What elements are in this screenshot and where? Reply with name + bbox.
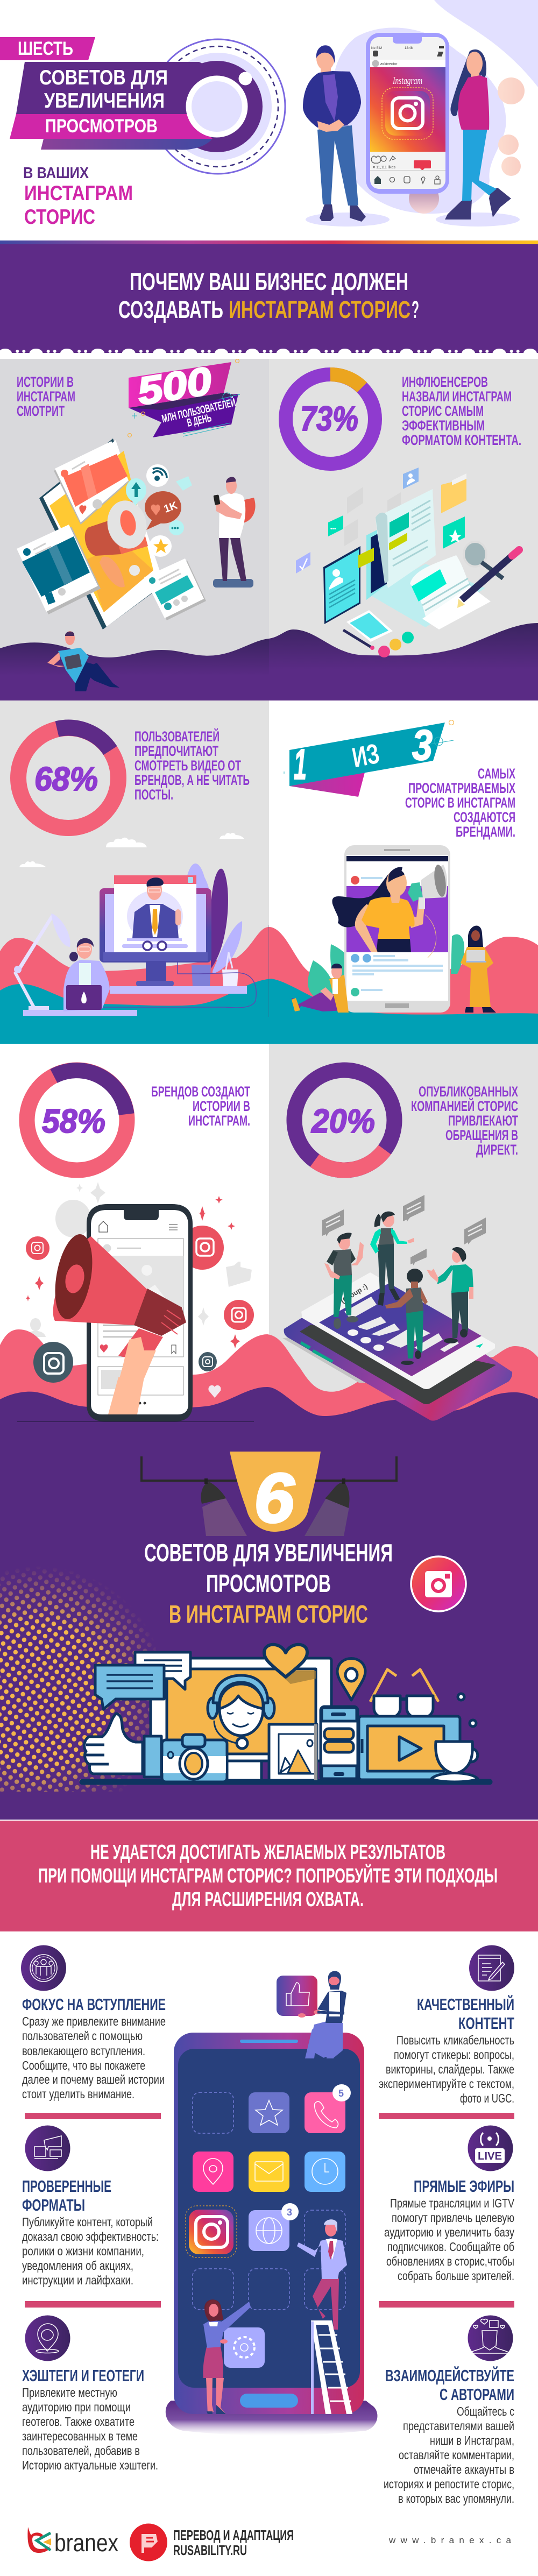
heading — [385, 2366, 514, 2404]
person: woman — [370, 1212, 414, 1306]
teal waves — [0, 979, 538, 1044]
megaphone — [85, 497, 151, 588]
camera lens circle — [151, 39, 285, 174]
smartphone: askivector — [380, 62, 398, 66]
section title: ИНСТАГРАМ СТОРИС — [229, 296, 410, 323]
woman pointing — [203, 2299, 251, 2414]
text: users prefer video: ПРЕДПОЧИТАЮТ — [134, 743, 218, 759]
donut 68%: 68% — [34, 761, 98, 798]
white separator — [0, 1820, 538, 1821]
body text: Общайтесь с — [457, 2404, 514, 2418]
section title: СОЗДАВАТЬ — [118, 296, 223, 323]
text: direct messages — [411, 1084, 518, 1158]
banner: 1 of 3: ИЗ — [350, 738, 382, 774]
body text: уведомления об акциях, — [22, 2259, 133, 2273]
banner: 500 million users: 500 — [134, 359, 215, 413]
lens centre — [186, 72, 252, 138]
pink waves — [0, 927, 538, 1022]
divider — [379, 2301, 514, 2308]
body text: отмечайте аккаунты в — [414, 2462, 514, 2476]
phone frame — [87, 1204, 193, 1421]
text: brands create stories: БРЕНДОВ СОЗДАЮТ — [151, 1084, 250, 1100]
icon: arrow bubble — [126, 478, 146, 506]
text: users prefer video: ПОЛЬЗОВАТЕЛЕЙ — [134, 728, 220, 745]
text: most viewed stories — [405, 766, 515, 840]
heading: ПРОВЕРЕННЫЕ — [22, 2177, 111, 2196]
lower desk — [23, 1010, 137, 1016]
banner: 500 million users: МЛН ПОЛЬЗОВАТЕЛЕЙ — [160, 396, 237, 425]
tip: proven formats — [22, 2125, 159, 2287]
pink label — [0, 37, 95, 60]
logo: rusability — [130, 2523, 294, 2561]
banner: 500 million users: В ДЕНЬ — [186, 412, 213, 429]
person with headphones — [208, 1675, 274, 1749]
person: front figure — [385, 1269, 428, 1365]
title: УВЕЛИЧЕНИЯ — [44, 89, 165, 112]
scalloped edge — [0, 348, 538, 359]
logo: branex: branex — [54, 2529, 118, 2557]
glasses — [370, 1669, 438, 1718]
purple ribbon — [16, 62, 215, 114]
banner: 1 of 3: 1 — [294, 740, 307, 788]
instagram badges — [26, 1226, 254, 1383]
divider — [379, 2113, 514, 2119]
left blue device — [144, 1736, 161, 1777]
footer logos — [27, 2523, 512, 2561]
man with thumbs up card — [277, 1971, 346, 2058]
heading: ФОКУС НА ВСТУПЛЕНИЕ — [22, 1995, 166, 2014]
phone body — [344, 845, 450, 1013]
map pin — [337, 1658, 365, 1700]
base line — [81, 1780, 491, 1784]
megaphone — [49, 1232, 186, 1362]
smartphone: Instagram — [392, 75, 422, 87]
cup — [431, 1742, 478, 1782]
desk — [110, 986, 247, 994]
body text — [379, 2033, 514, 2105]
body text: пользователей с помощью — [22, 2029, 143, 2043]
body text: заинтересованных в теме — [22, 2429, 138, 2443]
sitting man — [47, 631, 119, 691]
card: teal post — [17, 525, 101, 614]
divider — [25, 2113, 161, 2119]
lamp — [13, 914, 70, 1010]
woman with laptop — [63, 938, 110, 1011]
icon: likes bubble — [145, 491, 181, 530]
purple wave lower — [0, 1387, 538, 1820]
illustration: content workspace — [296, 468, 519, 657]
card: small teal post — [144, 558, 206, 620]
website: www.branex.ca — [388, 2535, 512, 2545]
tip: hashtags and geotags — [22, 2316, 158, 2472]
donut 58% — [27, 1070, 127, 1170]
text: influencers: ЭФФЕКТИВНЫМ — [402, 417, 485, 434]
phone shadow — [166, 2401, 377, 2436]
donut 73%: 73% — [300, 399, 358, 438]
wave — [269, 623, 538, 700]
smartphone — [321, 1707, 358, 1780]
man with phone — [213, 477, 256, 588]
text: users prefer video: СМОТРЕТЬ ВИДЕО ОТ — [134, 758, 241, 774]
body text: аудиторию при помощи — [22, 2400, 131, 2414]
title: СТОРИС — [24, 206, 95, 229]
heading: ХЭШТЕГИ И ГЕОТЕГИ — [22, 2366, 144, 2385]
donut 73% — [286, 374, 375, 464]
chat bubbles — [322, 1195, 486, 1265]
sitting man — [292, 964, 349, 1013]
text: stories watched by: СМОТРИТ — [17, 403, 65, 419]
camera — [162, 1735, 227, 1782]
icon: formats — [25, 2125, 70, 2171]
rule line — [17, 1421, 254, 1422]
body text: далее и почему вашей истории — [22, 2072, 165, 2086]
text: brands create stories: ИНСТАГРАМ. — [188, 1113, 250, 1129]
person: man waving — [324, 1233, 364, 1329]
icon: influencer — [468, 2316, 513, 2361]
icon: instagram badge — [411, 1556, 466, 1611]
callout text: ДЛЯ РАСШИРЕНИЯ ОХВАТА. — [172, 1888, 364, 1911]
body text: геотегов. Также охватите — [22, 2415, 134, 2429]
body text — [384, 2404, 514, 2506]
badge: number 6 — [230, 1452, 321, 1537]
panel: pink callout — [0, 1821, 538, 1931]
panel: tips — [0, 1931, 538, 2576]
title: СОВЕТОВ ДЛЯ — [39, 66, 168, 89]
card: coral post — [54, 441, 129, 525]
text: direct messages: ДИРЕКТ. — [476, 1142, 518, 1158]
illustration: phone with megaphone — [17, 438, 206, 629]
badge: number 6: 6 — [254, 1459, 295, 1537]
text: influencers — [402, 374, 521, 448]
text: stories watched by: ИНСТАГРАМ — [17, 388, 75, 405]
gradient ribbon — [41, 139, 213, 150]
icon: live — [468, 2125, 513, 2171]
gradient divider — [0, 240, 538, 244]
app icons — [186, 2084, 351, 2368]
icon: target group — [21, 1945, 66, 1991]
panel: 20 percent — [269, 1044, 538, 1420]
illustration: phone with megaphone and instagram icons — [26, 1182, 254, 1421]
heading: СОВЕТОВ ДЛЯ УВЕЛИЧЕНИЯ — [144, 1539, 393, 1567]
body text — [22, 2014, 166, 2101]
logo: rusability: RUSABILITY.RU — [173, 2542, 247, 2558]
callout text — [38, 1841, 498, 1911]
body text: ниши в Инстаграм, — [430, 2433, 514, 2447]
pink ribbon — [10, 114, 213, 139]
body text: Сразу же привлеките внимание — [22, 2014, 166, 2028]
illustration: video on monitor — [13, 864, 256, 1016]
cables — [102, 963, 256, 1008]
body text: Привлеките местную — [22, 2386, 117, 2400]
body text: пользователей, добавив в — [22, 2444, 140, 2458]
body text — [22, 2386, 158, 2472]
text: users prefer video — [134, 728, 250, 803]
body text — [384, 2196, 515, 2283]
panel: 68 percent — [0, 700, 269, 1044]
phone with apps — [166, 1971, 377, 2436]
logo: branex — [27, 2527, 118, 2557]
panel: six tips heading — [141, 1452, 466, 1628]
heart — [264, 1645, 307, 1677]
smartphone: ♥ 11,111 likes — [373, 166, 395, 169]
plants — [308, 934, 464, 1001]
phone base: (Group :) — [339, 1282, 369, 1305]
text: brands create stories: ИСТОРИИ В — [193, 1098, 250, 1114]
plant — [186, 864, 242, 974]
monitor — [151, 1658, 331, 1780]
text: brands create stories — [151, 1084, 250, 1129]
text: influencers: ИНФЛЮЕНСЕРОВ — [402, 374, 488, 390]
text: users prefer video: БРЕНДОВ, А НЕ ЧИТАТЬ — [134, 772, 250, 788]
picture card — [269, 1724, 317, 1780]
illustration: content workspace: ••• — [330, 526, 336, 532]
panel: 1 of 3 — [269, 700, 538, 1044]
panel: why your business — [0, 244, 538, 353]
lavender blob — [331, 27, 506, 214]
text: stories watched by — [17, 374, 75, 419]
body text: Сообщите, что вы покажете — [22, 2058, 145, 2072]
panel: header — [0, 0, 538, 240]
stage rail and spotlights — [141, 1456, 397, 1536]
section title: ПОЧЕМУ ВАШ БИЗНЕС ДОЛЖЕН — [130, 268, 408, 295]
phone base — [282, 1272, 512, 1421]
panel: 500 million — [0, 359, 269, 700]
tip: quality content — [379, 1945, 514, 2105]
title: В ВАШИХ — [23, 165, 89, 182]
icon: live: LIVE — [478, 2150, 502, 2162]
illustration: woman with megaphone on phone — [292, 845, 496, 1013]
donut 20%: 20% — [311, 1103, 375, 1140]
panel: 58 percent — [0, 1044, 269, 1420]
decorative corner shape — [434, 0, 538, 87]
icon: envelope — [176, 476, 192, 491]
donut 58%: 58% — [42, 1103, 105, 1140]
title — [18, 38, 168, 229]
sparkles — [26, 1196, 240, 1348]
app icons: 5 — [338, 2088, 344, 2099]
icon: white heart — [208, 1385, 221, 1398]
cups — [192, 952, 238, 986]
woman — [445, 49, 511, 220]
body text: Историю актуальные хэштеги. — [22, 2458, 158, 2472]
sparkles gray — [76, 1182, 209, 1326]
pastel circles — [409, 77, 525, 214]
body text: фото и UGC. — [460, 2091, 514, 2105]
tip: collaborate with authors — [384, 2316, 514, 2506]
illustration: content creation line art — [81, 1645, 491, 1784]
centre line — [268, 925, 269, 1017]
banner: 500 million users — [128, 359, 240, 437]
decorative gray shapes — [26, 1200, 252, 1337]
heading: В ИНСТАГРАМ СТОРИС — [169, 1600, 368, 1628]
text: users prefer video: ПОСТЫ. — [134, 787, 173, 803]
floor shadows — [306, 213, 520, 227]
divider — [25, 2301, 161, 2308]
pink wave lower — [0, 1329, 538, 1420]
chat bubble lines — [326, 1202, 482, 1236]
tip: focus on intro — [21, 1945, 166, 2101]
title: ШЕСТЬ — [18, 38, 73, 59]
section title: ? — [412, 296, 419, 323]
monitor — [100, 875, 211, 986]
wave — [0, 639, 269, 700]
donut 68% — [18, 728, 118, 828]
woman in hijab — [461, 926, 496, 1013]
illustration: team on isometric phone — [282, 1195, 512, 1421]
icon: dots bubble — [169, 520, 184, 535]
tablet — [359, 1716, 460, 1780]
banner: 1 of 3: 3 — [412, 721, 433, 769]
app icons: 3 — [287, 2207, 292, 2218]
speech bubbles — [95, 1652, 190, 1709]
icon: wifi bubble — [146, 464, 169, 487]
smartphone: No SIM — [371, 47, 382, 50]
body text: доказал свою эффективность: — [22, 2230, 159, 2244]
person: man right — [427, 1247, 473, 1343]
logo: rusability: ПЕРЕВОД И АДАПТАЦИЯ — [173, 2527, 294, 2543]
banner: 1 of 3 — [284, 720, 454, 797]
icon: dots bubble: ••• — [171, 523, 179, 532]
clouds — [19, 833, 244, 867]
title: ИНСТАГРАМ — [24, 182, 133, 205]
heading: ФОРМАТЫ — [22, 2196, 85, 2214]
heading: КОНТЕНТ — [458, 2014, 514, 2033]
body text: вовлекающего вступления. — [22, 2044, 145, 2058]
smartphone: 12:48 — [405, 47, 413, 50]
section title — [118, 268, 419, 323]
heading: ПРОСМОТРОВ — [206, 1569, 331, 1597]
heading — [417, 1994, 514, 2033]
text: influencers: СТОРИС САМЫМ — [402, 403, 484, 419]
title: ПРОСМОТРОВ — [45, 116, 158, 137]
smartphone — [366, 33, 449, 194]
man — [303, 45, 366, 222]
heading — [144, 1539, 393, 1628]
text: stories watched by: ИСТОРИИ В — [17, 374, 74, 390]
woman with megaphone — [332, 864, 448, 958]
dots — [458, 1694, 476, 1726]
text: most viewed stories: САМЫХ — [478, 766, 515, 782]
body text: стоит уделить внимание. — [22, 2087, 134, 2101]
man on ladder — [297, 2219, 352, 2414]
tip: live streams — [384, 2125, 515, 2283]
donut 20% — [294, 1070, 394, 1170]
panel: 73 percent — [269, 359, 538, 700]
body text — [22, 2215, 159, 2287]
icon: star bubble — [149, 535, 172, 557]
icon: document and pen — [469, 1945, 514, 1991]
icon: location — [25, 2316, 70, 2361]
body text: ролики о жизни компании, — [22, 2244, 144, 2258]
halftone dots — [0, 1569, 155, 1792]
heading — [22, 2177, 111, 2214]
arm and hand — [108, 1337, 156, 1414]
body text: Публикуйте контент, который — [22, 2215, 153, 2229]
thumbs up — [84, 1714, 143, 1774]
icon: likes bubble: 1K — [162, 499, 180, 515]
body text: инструкции и лайфхаки. — [22, 2273, 133, 2287]
